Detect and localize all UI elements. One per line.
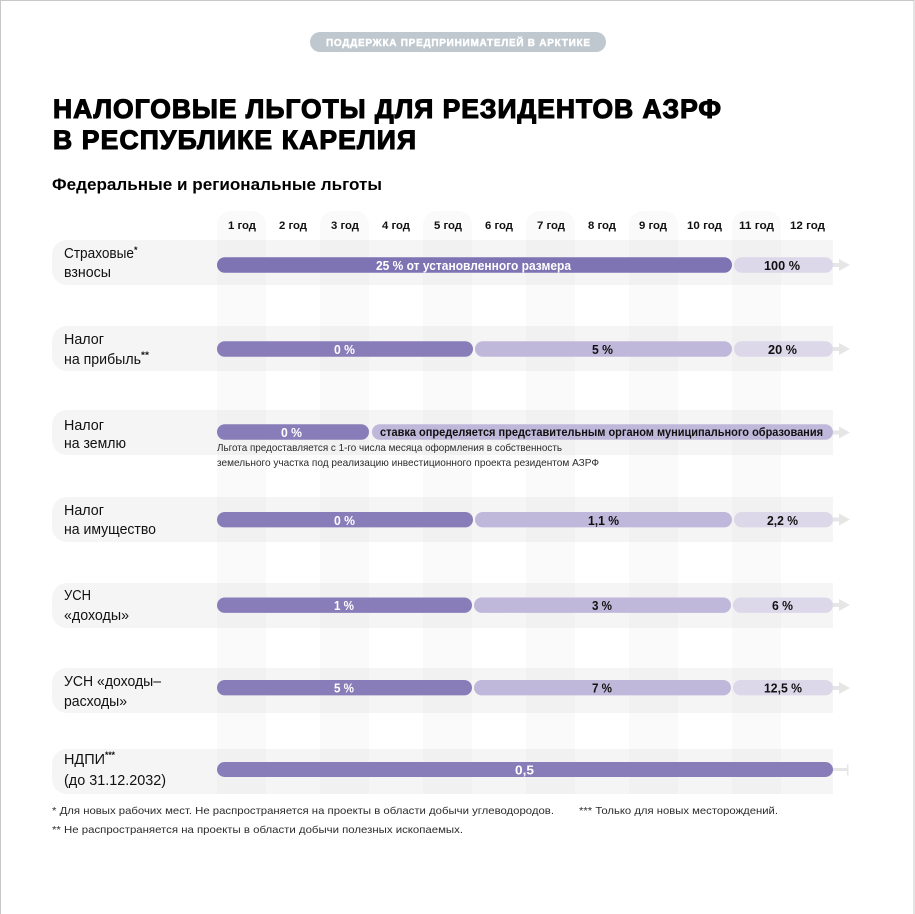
year labels: 2 год (279, 220, 307, 232)
row: УСН доходы-расходы (52, 668, 850, 713)
tag pill: ПОДДЕРЖКА ПРЕДПРИНИМАТЕЛЕЙ В АРКТИКЕ (326, 36, 590, 49)
year column stripes (217, 211, 781, 794)
row: Страховые взносы: * (134, 245, 138, 255)
row: Налог на прибыль: ** (141, 350, 150, 360)
row: Налог на прибыль: 0 % (334, 343, 355, 357)
row: Налог на имущество: на имущество (64, 521, 156, 538)
row: УСН доходы: УСН (64, 587, 91, 604)
row: НДПИ: 0,5 (515, 764, 534, 778)
row: УСН доходы-расходы: УСН «доходы– (64, 673, 162, 690)
row: Налог на прибыль: Налог (64, 331, 104, 348)
subtitle: Федеральные и региональные льготы (52, 176, 382, 194)
row: Налог на имущество: 1,1 % (588, 514, 619, 528)
row: Налог на имущество: Налог (64, 502, 104, 519)
row: Налог на землю: Налог (64, 417, 104, 434)
year labels: 1 год (228, 220, 256, 232)
row: Налог на землю (52, 410, 850, 469)
row: Налог на прибыль: на прибыль (64, 351, 141, 368)
land tax note: Льгота предоставляется с 1-го числа месяца оформления в собственность (217, 442, 562, 454)
row: Налог на прибыль: 5 % (592, 343, 613, 357)
row: УСН доходы-расходы: расходы» (64, 693, 127, 710)
title: В РЕСПУБЛИКЕ КАРЕЛИЯ (53, 125, 416, 155)
row: Страховые взносы: взносы (64, 264, 111, 281)
year labels: 12 год (790, 220, 825, 232)
row: НДПИ: *** (105, 750, 115, 760)
year labels: 6 год (485, 220, 513, 232)
row: Налог на имущество (52, 497, 850, 542)
year labels: 4 год (382, 220, 410, 232)
row: УСН доходы: «доходы» (64, 607, 129, 624)
footnotes: * Для новых рабочих мест. Не распространяется на проекты в области добычи углеводородов. (52, 805, 554, 817)
row: УСН доходы: 3 % (592, 599, 612, 613)
row: Страховые взносы (52, 240, 850, 285)
land tax note: земельного участка под реализацию инвестиционного проекта резидентом АЗРФ (217, 457, 599, 469)
footnotes: ** Не распространяется на проекты в области добычи полезных ископаемых. (52, 824, 463, 836)
row: НДПИ (52, 749, 848, 794)
row: УСН доходы-расходы: 7 % (592, 682, 612, 696)
footnotes (52, 805, 778, 836)
year labels: 5 год (434, 220, 462, 232)
year labels: 3 год (331, 220, 359, 232)
row: НДПИ: (до 31.12.2032) (64, 772, 166, 789)
row: Налог на землю: ставка определяется представительным органом муниципального образования (380, 425, 823, 439)
year labels: 7 год (537, 220, 565, 232)
row: Страховые взносы: 100 % (764, 259, 800, 273)
row: УСН доходы-расходы: 5 % (334, 682, 354, 696)
row: Налог на прибыль (52, 326, 850, 371)
row: Налог на имущество: 0 % (334, 514, 355, 528)
row: Налог на прибыль: 20 % (768, 343, 797, 357)
row: Налог на землю: на землю (64, 435, 126, 452)
row: Налог на имущество: 2,2 % (767, 514, 798, 528)
row: Страховые взносы: 25 % от установленного размера (376, 259, 572, 273)
year labels: 8 год (588, 220, 616, 232)
year labels: 11 год (739, 220, 774, 232)
row: УСН доходы: 1 % (334, 599, 354, 613)
row: Налог на землю: 0 % (281, 426, 302, 440)
year labels: 10 год (687, 220, 722, 232)
year labels: 9 год (639, 220, 667, 232)
land tax note (217, 442, 599, 469)
year labels (228, 220, 825, 232)
row: УСН доходы: 6 % (772, 599, 793, 613)
title: НАЛОГОВЫЕ ЛЬГОТЫ ДЛЯ РЕЗИДЕНТОВ АЗРФ (53, 94, 721, 124)
tag pill (310, 32, 606, 52)
row: Страховые взносы: Страховые (64, 245, 134, 262)
row: УСН доходы (52, 583, 850, 628)
title (53, 94, 721, 155)
row: НДПИ: НДПИ (64, 751, 105, 768)
row: УСН доходы-расходы: 12,5 % (764, 682, 802, 696)
footnotes: *** Только для новых месторождений. (579, 805, 778, 817)
